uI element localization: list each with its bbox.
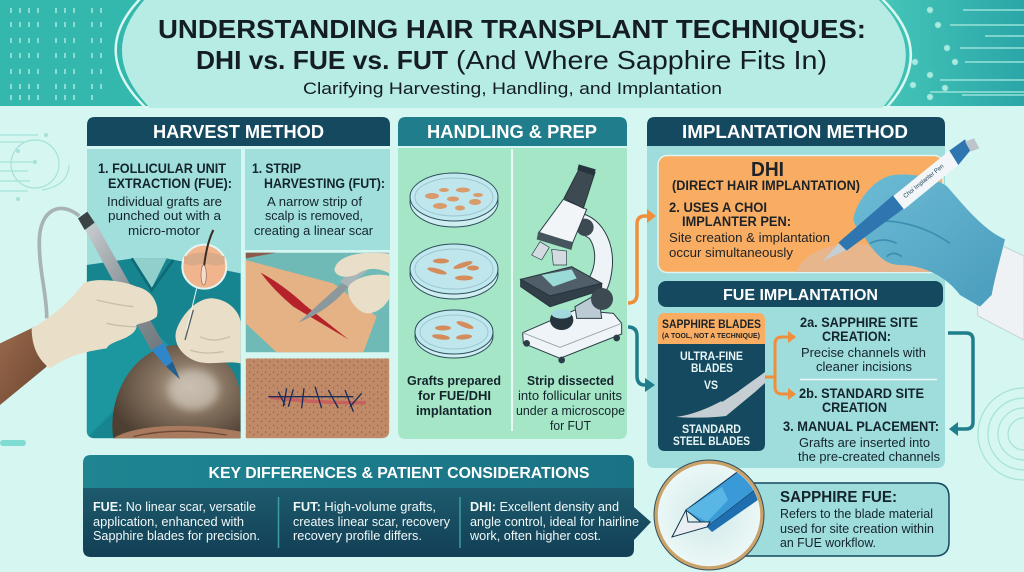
DHI box: IMPLANTER PEN:: [682, 214, 791, 229]
sapphire blades box: ULTRA-FINE: [680, 351, 743, 363]
harvest header: [87, 117, 390, 146]
column: FUT: creating a linear scar: [254, 223, 374, 238]
sapphire blades box: BLADES: [691, 363, 733, 375]
FUE implantation header: FUE IMPLANTATION: [723, 287, 878, 304]
FUT summary: [293, 500, 451, 543]
column: FUT: scalp is removed,: [265, 208, 363, 223]
sapphire blades box: SAPPHIRE BLADES: [662, 319, 761, 331]
arrow: teal to FUE implantation: [628, 327, 655, 392]
caption: FUE/DHI grafts: implantation: [416, 403, 492, 418]
panel: handling and prep: [398, 117, 627, 439]
panel: sapphire FUE: used for site creation within: [780, 521, 934, 536]
text: sapphire site creation: CREATION:: [822, 328, 891, 344]
title ellipse: [122, 0, 906, 108]
icon: lab coat sleeve: [976, 240, 1024, 340]
panel: implantation method: [647, 117, 945, 468]
photo: FUE extraction: [0, 208, 241, 440]
FUE summary: application, enhanced with: [93, 515, 244, 529]
FUE summary: Sapphire blades for precision.: [93, 529, 260, 543]
icon: blue-gloved hand with Choi pen: Choi Implanter Pen: [902, 163, 946, 200]
sapphire blades box: STANDARD: [682, 424, 741, 436]
DHI box: Site creation & implantation: [669, 230, 830, 245]
DHI box: (DIRECT HAIR IMPLANTATION): [672, 178, 860, 193]
title: (And Where Sapphire Fits In): [456, 45, 827, 75]
FUT summary: creates linear scar, recovery: [293, 515, 451, 529]
arrows: sapphire split: [765, 331, 796, 400]
caption: FUT strip: into follicular units: [518, 388, 623, 403]
icon: blue-gloved hand with Choi pen: [823, 138, 1005, 307]
text: standard site and manual placement: CREATION: [822, 399, 887, 415]
text: sapphire site creation: cleaner incisions: [816, 359, 912, 374]
text: sapphire site creation: [800, 314, 926, 374]
icon: right assisting hand: [175, 298, 241, 363]
caption: FUT strip: [516, 373, 625, 433]
caption: FUE/DHI grafts: [407, 373, 501, 418]
DHI box: 2. USES A CHOI: [669, 200, 767, 215]
panel: sapphire FUE: an FUE workflow.: [780, 535, 876, 550]
icon: sapphire blade lens: [654, 460, 765, 570]
handling header: [398, 117, 627, 146]
caption: FUT strip: under a microscope: [516, 403, 625, 418]
column: FUT: A narrow strip of: [267, 194, 362, 209]
icon: hand with micro-motor: [0, 208, 180, 405]
text: standard site and manual placement: [783, 385, 940, 464]
text: sapphire site creation: Precise channels with: [801, 345, 926, 360]
caption: FUE/DHI grafts: Grafts prepared: [407, 373, 501, 388]
panel: sapphire FUE: [654, 460, 949, 570]
DHI summary: work, often higher cost.: [469, 529, 601, 543]
handling body: [398, 148, 627, 439]
text: standard site and manual placement: the pre-created channels: [798, 449, 940, 464]
photo: sutured scar: [246, 358, 389, 438]
column: FUE: EXTRACTION (FUE):: [108, 176, 232, 191]
implantation header: IMPLANTATION METHOD: [682, 122, 908, 142]
column: FUT: [245, 149, 390, 250]
photo: strip incision: [246, 252, 390, 352]
sapphire blades box: [658, 313, 765, 451]
harvest header: HARVEST METHOD: [153, 122, 324, 142]
title: DHI vs. FUE vs. FUT: [196, 45, 448, 75]
circuit lines right: [910, 8, 1024, 100]
FUE summary: [93, 500, 260, 543]
arrow: teal bracket: [948, 333, 973, 436]
column: FUE: Individual grafts are: [107, 194, 222, 209]
panel: key differences: [83, 455, 651, 557]
caption: FUE/DHI grafts: for FUE/DHI: [418, 388, 491, 403]
header band: [0, 0, 1024, 106]
text: standard site and manual placement: 3. MANUAL PLACEMENT:: [783, 418, 939, 434]
panel: sapphire FUE: SAPPHIRE FUE:: [780, 489, 897, 506]
DHI box: occur simultaneously: [669, 245, 794, 260]
icon: petri dishes: [410, 173, 498, 358]
FUT summary: FUT: High-volume grafts,: [293, 500, 436, 514]
DHI box: DHI: [751, 159, 784, 181]
handling header: HANDLING & PREP: [427, 122, 597, 142]
column: FUT: HARVESTING (FUT):: [264, 176, 385, 191]
icon: microscope: [521, 164, 622, 363]
FUE implantation header: [658, 281, 943, 307]
caption: FUT strip: Strip dissected: [527, 373, 614, 388]
dotted pattern left: [10, 8, 102, 100]
caption: FUT strip: for FUT: [550, 418, 591, 433]
DHI summary: [469, 500, 639, 543]
text: sapphire site creation: 2a. SAPPHIRE SITE: [800, 314, 918, 330]
left decoration: [0, 133, 69, 446]
inset: hair follicle: [182, 230, 226, 330]
concentric decoration: [978, 388, 1024, 480]
DHI box: [658, 156, 943, 272]
text: standard site and manual placement: Grafts are inserted into: [799, 435, 930, 450]
title: UNDERSTANDING HAIR TRANSPLANT TECHNIQUES:: [158, 14, 866, 44]
arrow: orange to DHI: [628, 209, 656, 303]
column: FUE: punched out with a: [108, 208, 222, 223]
FUE summary: FUE: No linear scar, versatile: [93, 500, 256, 514]
DHI summary: angle control, ideal for hairline: [470, 515, 639, 529]
key differences header: [83, 455, 634, 488]
column: FUE: micro-motor: [128, 223, 201, 238]
icon: steel scalpel: [676, 372, 765, 418]
sapphire blades box: (A TOOL, NOT A TECHNIQUE): [662, 333, 760, 340]
FUT summary: recovery profile differs.: [293, 529, 422, 543]
title: Clarifying Harvesting, Handling, and Implantation: [303, 80, 722, 98]
sapphire blades box: STEEL BLADES: [673, 436, 750, 448]
text: standard site and manual placement: 2b. STANDARD SITE: [799, 385, 924, 401]
column: FUE: 1. FOLLICULAR UNIT: [98, 161, 227, 176]
panel: harvest method: [87, 117, 390, 438]
title: [158, 14, 866, 98]
column: FUT: 1. STRIP: [252, 161, 301, 176]
panel: sapphire FUE: Refers to the blade material: [780, 506, 933, 521]
key differences header: KEY DIFFERENCES & PATIENT CONSIDERATIONS: [208, 465, 590, 482]
DHI summary: DHI: Excellent density and: [470, 500, 619, 514]
sapphire blades box: VS: [704, 380, 718, 392]
title ring: [116, 0, 911, 108]
implantation header: [647, 117, 945, 146]
column: FUE: [87, 149, 241, 438]
